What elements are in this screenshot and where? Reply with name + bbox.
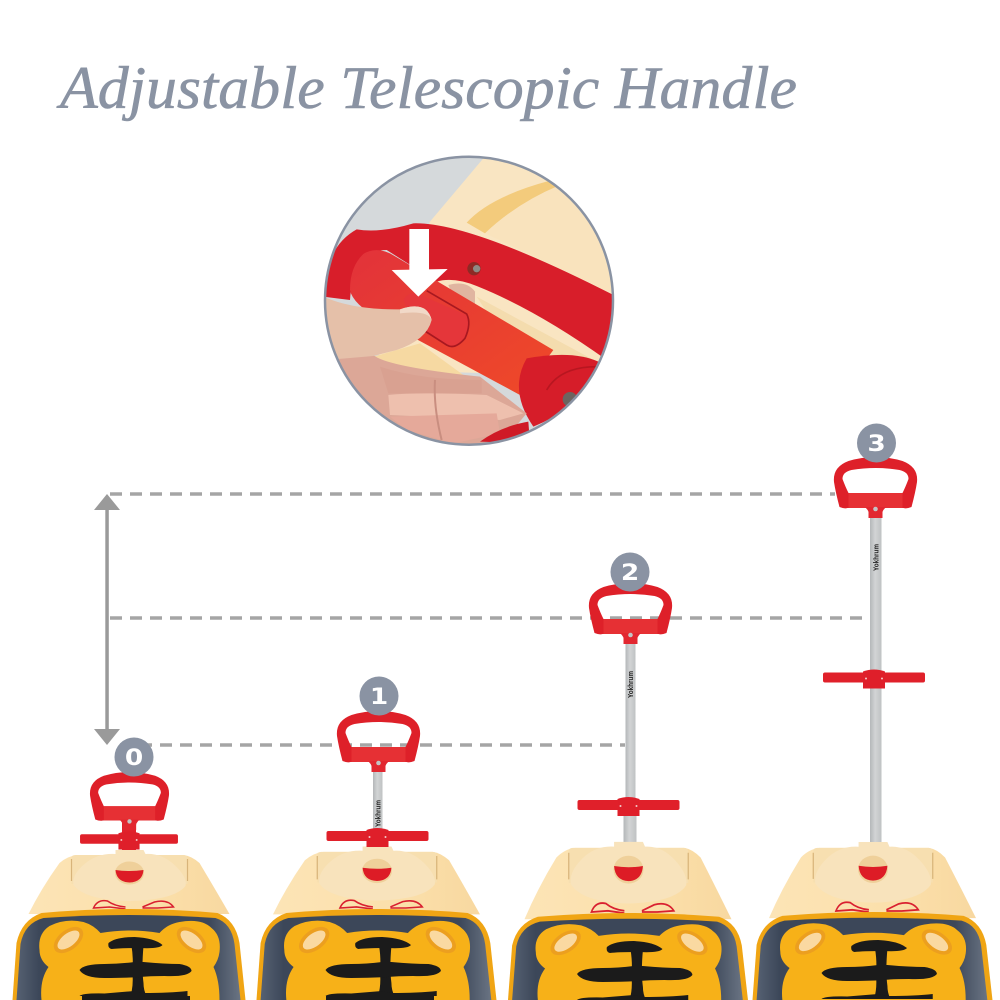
photo: thumb pressing handle button <box>323 157 617 447</box>
pole level 2: Yokhrum <box>628 671 635 698</box>
handle extended level 1 <box>326 711 428 847</box>
badge 0: 0 <box>125 744 143 770</box>
height range double arrow <box>94 494 120 745</box>
pole level 3 <box>870 512 882 844</box>
retracted handle <box>80 772 178 850</box>
handle extended level 1: Yokhrum <box>376 800 382 827</box>
pole level 2 <box>624 640 636 848</box>
badge 1 <box>360 676 398 716</box>
badge 2 <box>610 552 650 592</box>
badge 0 <box>114 738 154 776</box>
badge 2: 2 <box>621 559 639 585</box>
dashed guide lines <box>110 494 862 745</box>
handle extended level 2 <box>578 583 680 816</box>
suitcase position 3 <box>752 457 992 1000</box>
badge 1: 1 <box>370 683 388 709</box>
suitcase position 0 <box>12 772 246 1000</box>
pole level 3: Yokhrum <box>874 544 880 571</box>
suitcase position 2 <box>508 583 748 1000</box>
title: Adjustable Telescopic Handle <box>56 55 797 121</box>
suitcase position 1 <box>256 711 496 1000</box>
handle extended level 3 <box>823 457 925 688</box>
badge 3 <box>857 424 896 462</box>
badge 3: 3 <box>867 430 886 456</box>
